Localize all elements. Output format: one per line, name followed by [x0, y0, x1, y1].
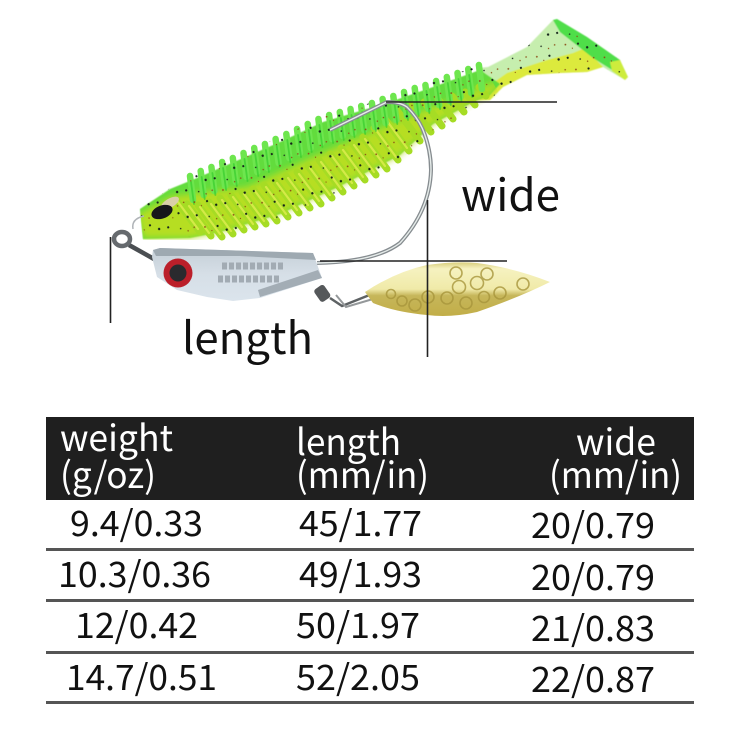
row 2: 10.3/0.36	[58, 547, 211, 598]
table header: (g/oz)	[60, 447, 156, 499]
row 4: 52/2.05	[296, 650, 420, 701]
table header: wide	[576, 414, 656, 466]
fish body base	[140, 70, 500, 239]
row 1: 20/0.79	[531, 498, 655, 549]
row 1: 9.4/0.33	[70, 496, 203, 547]
label: length: length	[182, 303, 313, 367]
hook	[114, 102, 431, 263]
table header: weight	[60, 410, 173, 462]
table header: (mm/in)	[296, 447, 429, 499]
table header: length	[296, 414, 401, 466]
lead head eye	[164, 258, 192, 288]
row 4: 14.7/0.51	[66, 650, 217, 701]
row 2: 20/0.79	[531, 550, 655, 601]
row 3: 21/0.83	[531, 601, 655, 652]
row 3: 50/1.97	[296, 598, 420, 649]
table header: (mm/in)	[549, 447, 682, 499]
row 3	[46, 598, 694, 654]
left length guide line	[110, 237, 112, 323]
horizontal width guide line	[320, 260, 507, 262]
right length guide line	[426, 200, 428, 357]
top width guide line	[386, 101, 557, 103]
row 1: 45/1.77	[299, 496, 422, 547]
fish eye	[149, 194, 181, 222]
lead jig head	[152, 248, 322, 301]
fish speckles	[140, 20, 625, 238]
row 1	[46, 496, 694, 551]
specification table	[46, 410, 694, 704]
label: wide: wide	[461, 160, 560, 224]
soft bait fish	[138, 19, 628, 239]
swivel and split ring	[313, 284, 373, 307]
row 4: 22/0.87	[531, 652, 655, 703]
row 3: 12/0.42	[75, 598, 198, 649]
fish tail	[470, 19, 628, 100]
fish upper ribs	[190, 65, 482, 204]
table header	[46, 410, 694, 500]
row 2: 49/1.93	[299, 547, 422, 598]
row 4	[46, 650, 694, 704]
row 2	[46, 547, 694, 602]
fish lower ribs	[176, 87, 486, 237]
spinner blade	[365, 262, 550, 316]
fish yellow belly	[138, 78, 505, 238]
